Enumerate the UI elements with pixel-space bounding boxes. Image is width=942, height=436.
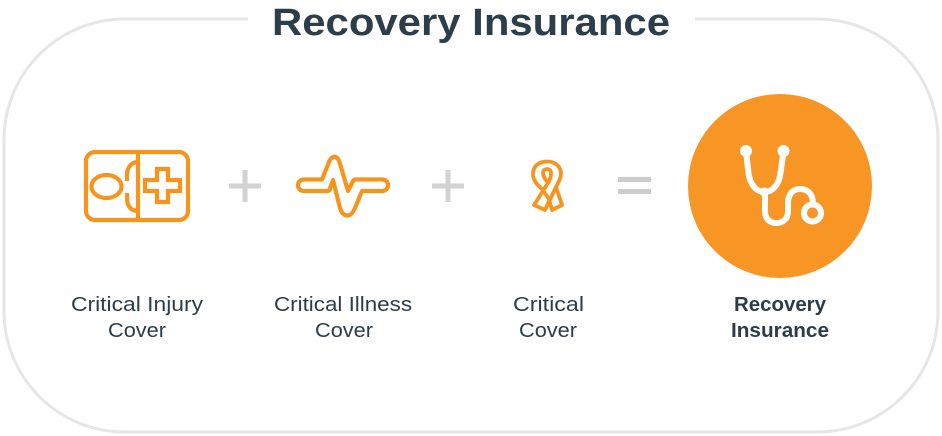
label: critical illness cover (274, 294, 412, 342)
label: critical injury cover (71, 294, 203, 342)
icon: pulse line (298, 157, 388, 216)
icon: plus sign (229, 170, 261, 202)
label: recovery insurance: Recovery (734, 294, 827, 316)
label: critical injury cover: Cover (108, 320, 166, 342)
label: critical injury cover: Critical Injury (71, 294, 203, 316)
label: critical illness cover: Critical Illness (274, 294, 412, 316)
label: critical cover (513, 294, 584, 342)
label: recovery insurance (731, 294, 829, 342)
icon: critical injury card with head and cross (86, 152, 188, 220)
icon: stethoscope in orange circle (688, 94, 872, 278)
title: Recovery Insurance (272, 2, 670, 44)
label: recovery insurance: Insurance (731, 320, 829, 342)
icon: awareness ribbon (533, 162, 562, 210)
label: critical cover: Critical (513, 294, 584, 316)
icon: equals sign (618, 180, 651, 192)
label: critical illness cover: Cover (315, 320, 373, 342)
icon: plus sign (432, 170, 464, 202)
label: critical cover: Cover (519, 320, 577, 342)
